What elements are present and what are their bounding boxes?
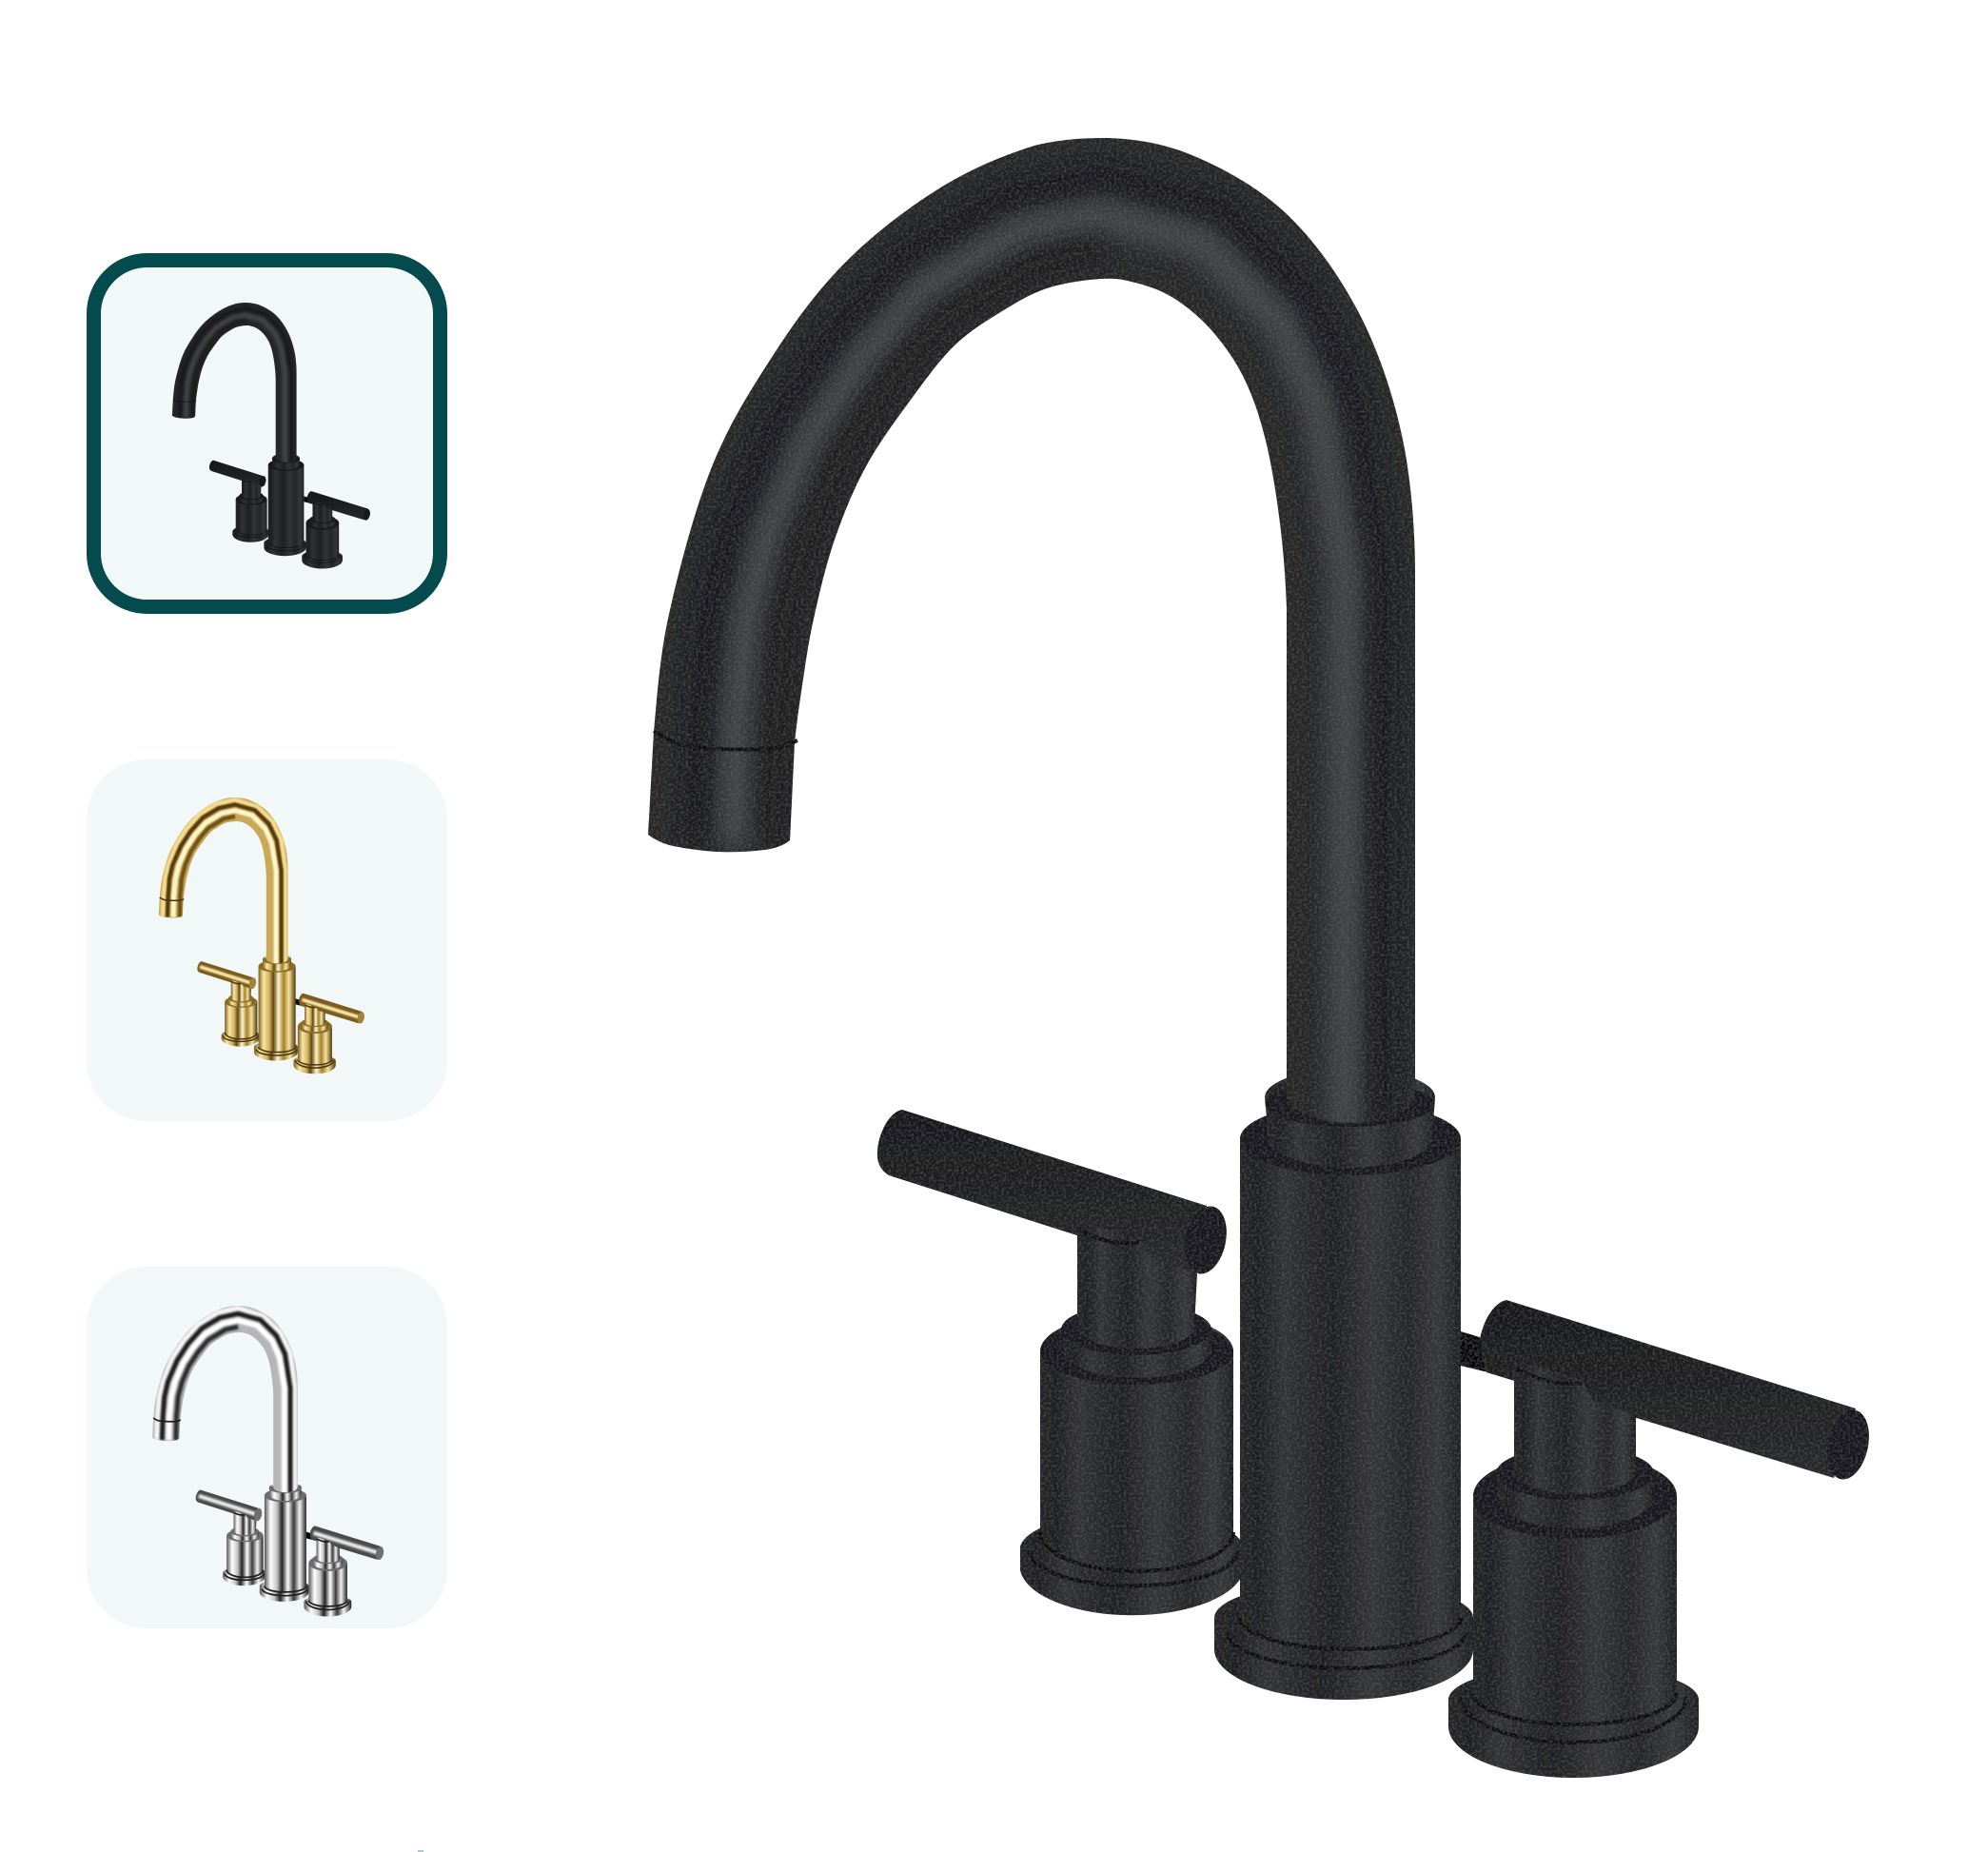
icon: matte black faucet thumbnail	[172, 303, 371, 568]
swatch card	[87, 759, 447, 1121]
main product image: large matte black faucet	[648, 138, 1875, 1778]
panel: selected matte black swatch	[93, 261, 440, 607]
swatch card with teal border	[93, 261, 440, 607]
swatch card	[87, 1267, 447, 1628]
small mark at bottom edge	[418, 1850, 423, 1852]
panel: brushed gold swatch	[87, 759, 447, 1121]
icon: chrome faucet thumbnail	[152, 1306, 384, 1616]
panel: chrome swatch	[87, 1267, 447, 1628]
icon: gold faucet thumbnail	[159, 798, 365, 1074]
